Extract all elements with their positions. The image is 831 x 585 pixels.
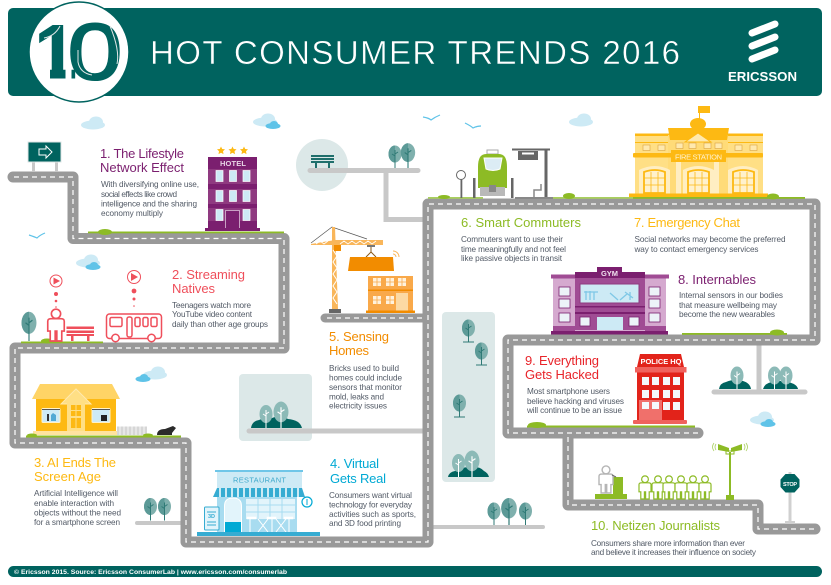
text 5: sensors that monitor <box>329 383 402 392</box>
restaurant: 3D <box>208 514 215 520</box>
text 3 <box>34 455 121 527</box>
text 2: Natives <box>172 281 216 296</box>
text 1: economy multiply <box>101 209 164 218</box>
text 5 <box>329 329 402 410</box>
text 5: 5. Sensing <box>329 329 389 344</box>
text 3: Screen Age <box>34 469 101 484</box>
right branch trees <box>719 366 798 390</box>
badge: number 10: 1 <box>34 10 77 95</box>
badge: number 10 <box>29 2 129 102</box>
text 4: activities such as sports, <box>329 510 416 519</box>
text 7: 7. Emergency Chat <box>634 215 740 230</box>
decorative light panels <box>239 139 495 482</box>
header banner <box>8 2 822 102</box>
trees near branch <box>488 498 532 525</box>
direction sign <box>28 142 61 172</box>
text 8: become the new wearables <box>679 310 775 319</box>
text 8: 8. Internables <box>678 272 756 287</box>
text 10: and believe it increases their influence on society <box>591 548 757 557</box>
text 4: Consumers want virtual <box>329 491 412 500</box>
crane and house <box>311 227 415 313</box>
text 2: YouTube video content <box>172 310 253 319</box>
text 6: time meaningfully and not feel <box>461 245 566 254</box>
bench and trees <box>311 143 415 168</box>
fire station: FIRE STATION <box>675 152 722 162</box>
clouds and birds <box>29 114 776 427</box>
road <box>13 177 815 542</box>
text 4: and 3D food printing <box>329 519 401 528</box>
title: HOT CONSUMER TRENDS 2016 <box>150 34 680 71</box>
text 1: Network Effect <box>100 160 184 175</box>
text 7: Social networks may become the preferred <box>634 235 786 244</box>
text 1 <box>100 146 199 218</box>
gym <box>551 267 787 336</box>
text 8: that measure wellbeing may <box>679 301 778 310</box>
text 5: homes could include <box>329 374 402 382</box>
text 3: Artificial Intelligence will <box>34 489 118 498</box>
police HQ <box>527 354 695 428</box>
text 6: like passive objects in transit <box>461 254 563 263</box>
streaming scene <box>21 270 162 344</box>
text 1: intelligence and the sharing <box>101 200 197 208</box>
text 9: Most smartphone users <box>527 387 610 396</box>
text 5: Homes <box>329 343 370 358</box>
text 2: daily than other age groups <box>172 320 268 329</box>
text 9: Gets Hacked <box>525 367 599 382</box>
restaurant <box>197 470 320 536</box>
text 2: Teenagers watch more <box>172 301 251 310</box>
text 1: 1. The Lifestyle <box>100 146 184 161</box>
police HQ: POLICE HQ <box>640 357 682 366</box>
panel trees <box>251 320 489 477</box>
secondary light lanes <box>137 170 805 527</box>
Ericsson logo: ERICSSON <box>728 69 797 84</box>
gym: GYM <box>601 269 618 278</box>
netizen journalists scene <box>595 443 748 500</box>
text 7 <box>634 215 786 254</box>
text 10: Consumers share more information than ever <box>591 539 745 548</box>
text 3: enable interaction with <box>34 499 114 508</box>
text 4: Gets Real <box>330 471 386 486</box>
text 7: way to contact emergency services <box>634 245 758 254</box>
text 10: 10. Netizen Journalists <box>591 518 720 533</box>
stop sign: STOP <box>783 482 797 488</box>
text 4: 4. Virtual <box>330 456 379 471</box>
text 10 <box>591 518 757 557</box>
restaurant: RESTAURANT <box>233 476 286 484</box>
text 9: 9. Everything <box>525 353 599 368</box>
text 1: With diversifying online use, <box>101 180 199 189</box>
hotel <box>88 146 284 235</box>
text 9: will continue to be an issue <box>526 406 622 415</box>
text 2 <box>172 267 268 329</box>
text 5: mold, leaks and <box>329 392 384 402</box>
text 3: 3. AI Ends The <box>34 455 116 470</box>
text 4 <box>329 456 416 528</box>
train station <box>428 149 633 199</box>
stop sign <box>780 472 800 524</box>
footer <box>8 566 822 577</box>
text 1: social effects like crowd <box>101 190 177 199</box>
text 8: Internal sensors in our bodies <box>679 291 783 300</box>
text 3: objects without the need <box>34 508 121 518</box>
badge: number 10: 0 <box>68 7 122 96</box>
fire station <box>629 106 805 200</box>
text 4: technology for everyday <box>329 500 413 510</box>
footer: © Ericsson 2015. Source: Ericsson ConsumerLab | www.ericsson.com/consumerlab <box>14 568 287 576</box>
text 5: electricity issues <box>329 402 387 410</box>
house scene <box>26 384 181 438</box>
text 9: believe hacking and viruses <box>527 397 624 406</box>
text 5: Bricks used to build <box>329 364 399 373</box>
Ericsson logo <box>728 24 797 84</box>
text 8 <box>678 272 783 319</box>
text 9 <box>525 353 624 415</box>
text 6: Commuters want to use their <box>461 235 563 244</box>
text 2: 2. Streaming <box>172 267 245 282</box>
text 3: for a smartphone screen <box>34 518 120 527</box>
text 6 <box>461 215 582 263</box>
hotel: HOTEL <box>220 159 246 168</box>
text 6: 6. Smart Commuters <box>461 215 582 230</box>
trees by text 3 <box>144 498 171 520</box>
